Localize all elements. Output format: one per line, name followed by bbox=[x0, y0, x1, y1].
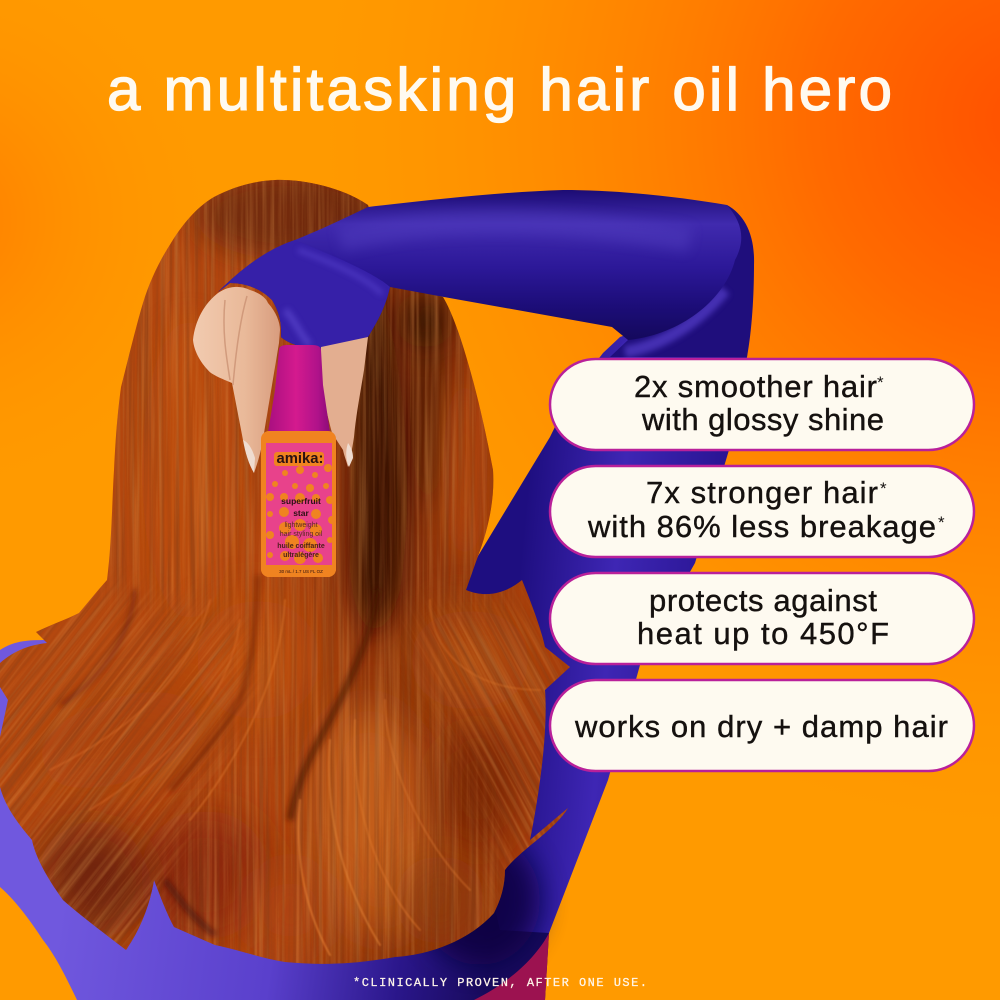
crown shading bbox=[195, 170, 385, 260]
hand holding the bottle bbox=[193, 287, 368, 473]
second finger bbox=[321, 337, 368, 467]
benefit pill: stronger hair bbox=[550, 466, 974, 557]
benefit pill: dry and damp hair bbox=[550, 680, 974, 771]
lower hair lobes bbox=[211, 610, 322, 708]
benefit pill: smoother hair: 2x smoother hair bbox=[634, 369, 877, 404]
flowing light strands bbox=[50, 600, 540, 955]
strand texture centre bbox=[200, 300, 300, 400]
highlight left lengths bbox=[164, 343, 230, 594]
back and shoulder bbox=[0, 640, 549, 1000]
elbow column bbox=[610, 205, 754, 357]
bottle label text: 30 mL / 1.7 US FL OZ bbox=[279, 569, 323, 574]
bottle label text: lightweight bbox=[284, 522, 318, 529]
benefit pill: heat protection: protects against bbox=[649, 583, 877, 618]
bottle label text bbox=[276, 450, 325, 574]
benefit pill: stronger hair: * bbox=[880, 479, 887, 498]
bottle body bbox=[261, 431, 336, 577]
bottle label text: star bbox=[293, 508, 309, 518]
benefit pill: smoother hair bbox=[550, 359, 974, 450]
shadow under hair bbox=[420, 835, 540, 965]
upper arm and side torso bbox=[464, 265, 754, 933]
person: back and torso in purple top bbox=[0, 265, 754, 1000]
long auburn hair bbox=[0, 170, 580, 970]
bottle label text: superfruit bbox=[281, 496, 321, 506]
bottle cap bbox=[268, 345, 330, 432]
benefit pill: dry and damp hair: works on dry + damp hair bbox=[574, 709, 948, 744]
benefit pill: stronger hair: 7x stronger hair bbox=[646, 475, 878, 510]
benefit pill: heat protection: heat up to 450°F bbox=[637, 616, 889, 651]
benefit pill: heat protection bbox=[550, 573, 974, 664]
benefit pill: smoother hair: * bbox=[877, 373, 884, 392]
bottle label text: hair styling oil bbox=[280, 531, 323, 538]
raised forearm in purple sleeve bbox=[218, 190, 754, 357]
dark shadow right of the bottle bbox=[350, 260, 407, 640]
sheen on cuff and forearm bbox=[285, 222, 690, 345]
forearm bbox=[218, 190, 741, 350]
sleeve cuff bbox=[218, 240, 390, 350]
bottle label text: amika: bbox=[276, 450, 324, 467]
knuckle creases bbox=[224, 296, 247, 385]
bottle pattern bbox=[266, 443, 332, 569]
benefit pill: stronger hair: with 86% less breakage bbox=[587, 509, 936, 544]
bottle label text: huile coiffante bbox=[277, 543, 325, 550]
product bottle bbox=[261, 345, 336, 577]
benefit pill: stronger hair: * bbox=[938, 513, 945, 532]
fist and index finger bbox=[193, 287, 280, 473]
fingernails bbox=[243, 440, 255, 473]
elbow highlight bbox=[625, 290, 725, 352]
title: a multitasking hair oil hero bbox=[107, 56, 892, 123]
footnote: *CLINICALLY PROVEN, AFTER ONE USE. bbox=[353, 976, 647, 990]
strand texture right lobes bbox=[412, 682, 548, 818]
dark seams between lobes bbox=[290, 590, 378, 820]
bottle label text: ultralégère bbox=[283, 552, 319, 559]
strand texture left lobes bbox=[92, 705, 232, 845]
red waistband bbox=[474, 933, 549, 1000]
benefit pill: smoother hair: with glossy shine bbox=[641, 402, 884, 437]
